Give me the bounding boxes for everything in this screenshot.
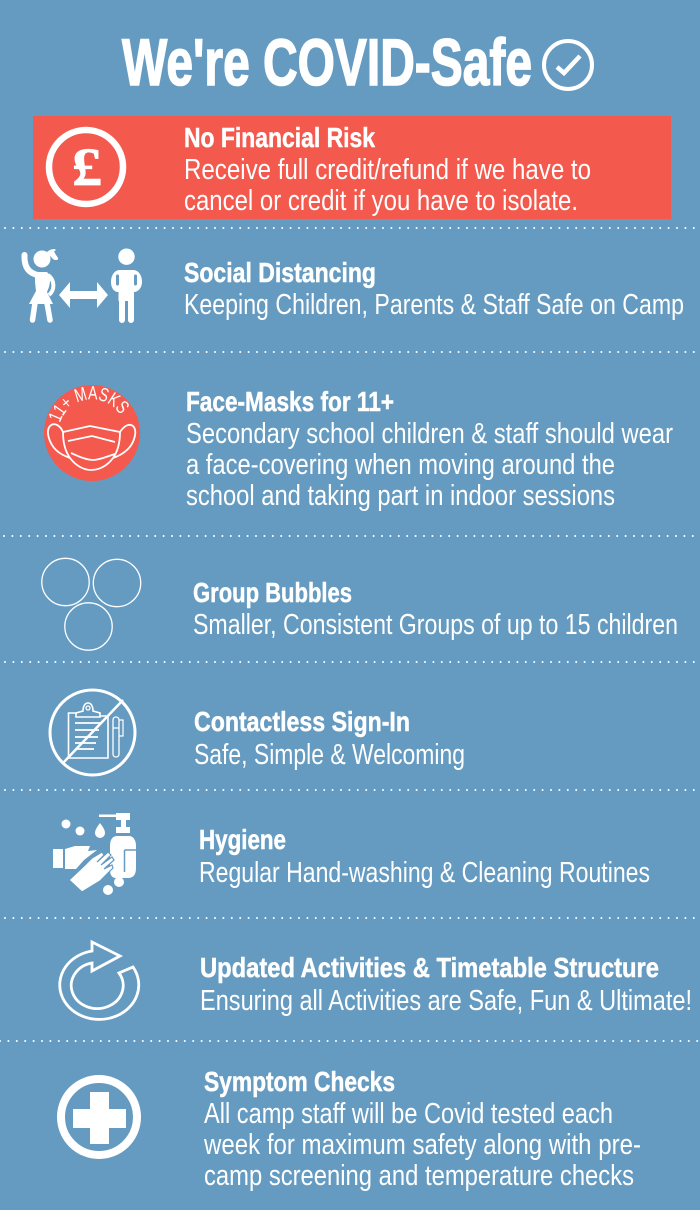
heading: symptom checks: Symptom Checks: [204, 1066, 395, 1097]
text: symptom line 1: All camp staff will be Covid tested each: [204, 1098, 613, 1130]
text: refund line 1: Receive full credit/refund if we have to: [184, 154, 591, 186]
icon: pound coin: [49, 130, 123, 204]
icon: hand washing: [53, 813, 136, 895]
icon: no clipboard: [50, 690, 135, 775]
icon: face mask badge: 11+ MASKS: [49, 386, 129, 422]
heading: no financial risk: No Financial Risk: [184, 122, 375, 153]
text: refund line 2: cancel or credit if you have to isolate.: [184, 185, 578, 217]
icon: refresh arrow: [60, 942, 139, 1019]
icon: face mask badge: [44, 385, 140, 481]
heading: contactless sign-in: Contactless Sign-In: [194, 706, 410, 737]
icon: group bubbles: [42, 558, 141, 650]
text: masks line 2: a face-covering when moving around the: [186, 449, 615, 481]
heading: group bubbles: Group Bubbles: [193, 577, 352, 608]
heading: hygiene: Hygiene: [199, 824, 286, 855]
icon: social distancing figures: [24, 249, 142, 320]
panel: no financial risk: [33, 116, 671, 219]
text: contactless sign-in: Safe, Simple & Welcoming: [194, 739, 465, 771]
heading: face masks: Face-Masks for 11+: [186, 386, 394, 417]
title: We're COVID-Safe: [122, 25, 532, 99]
icon: pound coin: £: [72, 137, 102, 197]
icon: check circle: [544, 41, 592, 89]
icon: medical cross: [61, 1079, 137, 1155]
text: masks line 3: school and taking part in indoor sessions: [186, 480, 615, 512]
heading: social distancing: Social Distancing: [184, 257, 376, 288]
